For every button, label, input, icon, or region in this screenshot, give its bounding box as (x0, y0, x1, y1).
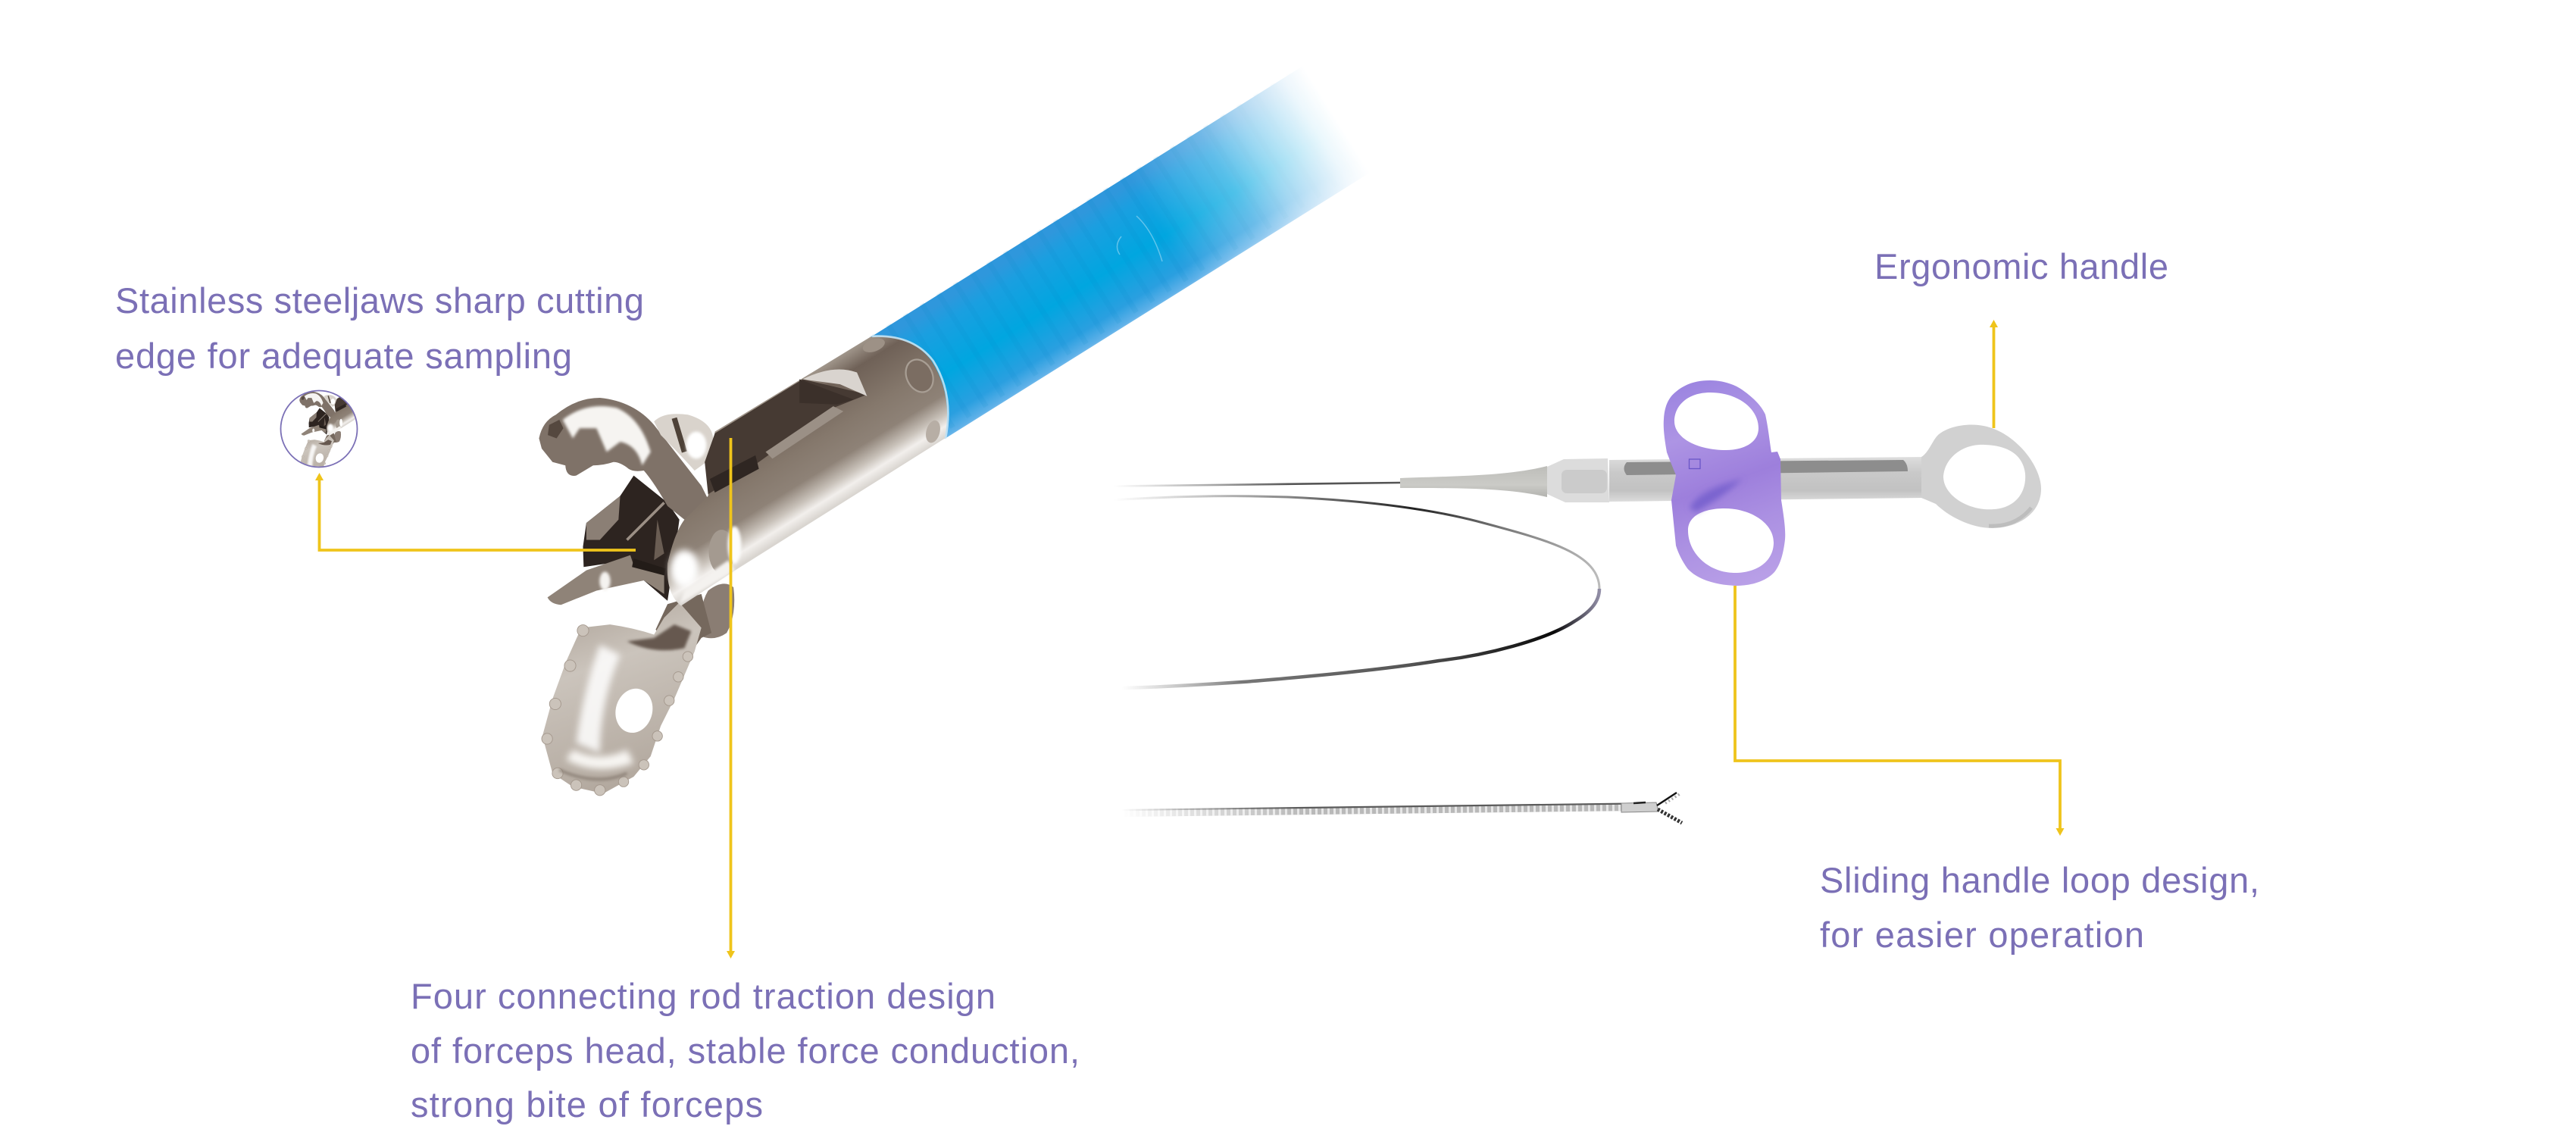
jaw lug (654, 414, 713, 471)
thumb ring (1921, 424, 2041, 528)
purple sliding loop (1664, 380, 1785, 586)
thumbnail of jaws (280, 389, 358, 468)
upper jaw (539, 398, 710, 520)
collar edge (872, 336, 948, 439)
text: ergonomic handle: Ergonomic handle (1874, 246, 2168, 286)
barrel rivets (861, 336, 943, 445)
barrel end and pin highlight (671, 527, 741, 604)
shaft slot (1624, 460, 1908, 475)
small cutting blade (548, 555, 664, 605)
text: stainless steel jaws (115, 280, 644, 376)
text: sliding handle loop (1820, 860, 2259, 955)
rear pin disk (701, 583, 734, 638)
arrow: jaws to thumbnail (315, 473, 636, 550)
metal barrel (667, 336, 947, 606)
text: stainless steel jaws: Stainless steeljaws sharp cutting (115, 280, 644, 321)
text: four connecting rod traction: Four connecting rod traction design (411, 976, 996, 1016)
blue catheter tube (870, 73, 1356, 439)
text: four connecting rod traction: of forceps head, stable force conduction, (411, 1031, 1080, 1071)
text: sliding handle loop: for easier operation (1820, 915, 2144, 955)
arrow: connecting rod to text (727, 438, 735, 959)
straight coiled forceps (1121, 793, 1682, 823)
text: four connecting rod traction: strong bite of forceps (411, 1084, 763, 1124)
upper wire (1091, 483, 1400, 486)
lower jaw (542, 602, 702, 796)
nozzle cone (1400, 466, 1547, 497)
jaw neck (655, 594, 711, 655)
text: four connecting rod traction (411, 976, 1080, 1124)
shaft (1609, 457, 1924, 502)
arrow: ring to ergonomic label (1990, 320, 1998, 428)
barrel slot (705, 370, 867, 494)
arrow: loop to sliding handle label (1735, 586, 2064, 836)
collar (1547, 458, 1609, 502)
dark inner mechanism (583, 476, 680, 601)
sliding handle body (1400, 424, 2041, 528)
text: stainless steel jaws: edge for adequate sampling (115, 336, 572, 376)
forceps head (539, 336, 948, 796)
text: sliding handle loop: Sliding handle loop design, (1820, 860, 2259, 900)
coiled wire loop (1099, 496, 1599, 688)
